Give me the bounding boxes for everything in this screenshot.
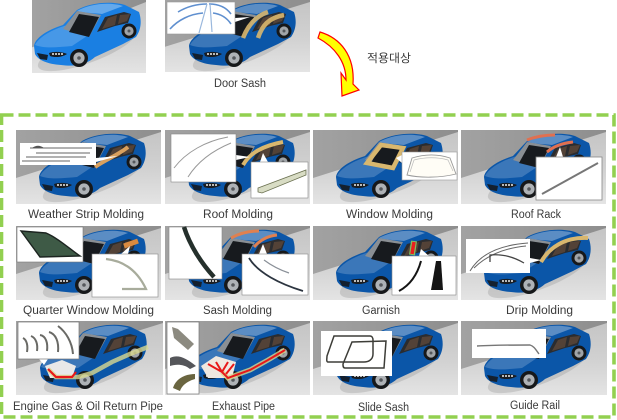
panel: Sash Molding [165, 226, 310, 317]
engine bay [201, 356, 236, 378]
inset [472, 329, 546, 358]
inset: parts [242, 244, 308, 295]
background [165, 130, 310, 204]
highlight [412, 241, 414, 255]
background [165, 226, 310, 300]
car [38, 134, 146, 211]
panel: Slide Sash [313, 321, 458, 414]
car [33, 3, 141, 80]
label: Exhaust Pipe [212, 401, 275, 413]
background [461, 130, 606, 204]
background [16, 321, 163, 395]
windshield ring [367, 145, 403, 168]
inset [18, 322, 79, 365]
car [335, 134, 443, 211]
panel: Window Molding [313, 130, 458, 221]
background [461, 321, 607, 395]
inset: profile [251, 153, 308, 198]
highlights [527, 135, 573, 152]
car [187, 230, 295, 307]
panel: Weather Strip Molding [16, 130, 161, 221]
sash highlight [243, 12, 284, 38]
label: Engine Gas & Oil Return Pipe [13, 401, 163, 413]
label: Weather Strip Molding [28, 209, 144, 221]
highlight [95, 147, 128, 167]
label: Quarter Window Molding [23, 305, 154, 317]
car [483, 325, 591, 402]
label: 적용대상: 적용대상 [367, 52, 411, 65]
car [188, 3, 296, 80]
inset [20, 143, 118, 165]
car [483, 134, 591, 211]
panel: Roof Molding [165, 130, 310, 221]
background [313, 321, 458, 395]
panel: Roof Rack [461, 130, 606, 221]
label: Slide Sash [358, 402, 409, 414]
car [38, 230, 146, 307]
panel: Exhaust Pipe [165, 321, 310, 413]
background [16, 226, 161, 300]
inset [396, 152, 457, 180]
inset: rails [171, 134, 250, 182]
panel: Garnish [313, 226, 458, 317]
panel: Quarter Window Molding [16, 226, 161, 317]
inset [167, 322, 199, 394]
highlight [541, 238, 588, 262]
car [483, 230, 591, 307]
panel: Drip Molding [461, 226, 606, 317]
label: Roof Molding [203, 209, 273, 221]
car [39, 325, 147, 402]
background [165, 0, 310, 72]
inset: molding [92, 246, 158, 297]
car [335, 230, 443, 307]
label: Drip Molding [506, 305, 573, 317]
engine bay [45, 360, 76, 378]
inset: sash parts [167, 2, 250, 34]
background [313, 226, 458, 300]
background [32, 0, 146, 73]
car [187, 134, 295, 211]
car [187, 325, 295, 402]
inset [536, 147, 602, 200]
background [313, 130, 458, 204]
label: Guide Rail [510, 400, 560, 412]
label: Garnish [362, 305, 400, 317]
label: Sash Molding [203, 305, 272, 317]
car [335, 325, 443, 402]
label: Window Molding [346, 209, 433, 221]
highlights [231, 231, 277, 247]
inset [466, 239, 541, 273]
arrow: applied targets [318, 32, 359, 96]
inset [321, 331, 392, 376]
inset: glass [17, 227, 83, 262]
panel: Engine Gas & Oil Return Pipe [13, 321, 163, 413]
background [16, 130, 161, 204]
inset [392, 249, 456, 295]
panel: base car [32, 0, 146, 80]
panel: Guide Rail [461, 321, 607, 412]
highlight [124, 241, 138, 246]
inset: seal [169, 227, 222, 279]
highlight [243, 142, 283, 165]
exhaust route [222, 350, 285, 378]
label: Roof Rack [511, 209, 561, 221]
background [165, 321, 310, 395]
background [461, 226, 606, 300]
pipe [208, 350, 285, 378]
panel: door sash [165, 0, 310, 80]
dashed frame [2, 115, 614, 417]
label: Door Sash: Door Sash [214, 78, 266, 90]
exhaust route [48, 347, 148, 377]
pipe [48, 369, 76, 377]
